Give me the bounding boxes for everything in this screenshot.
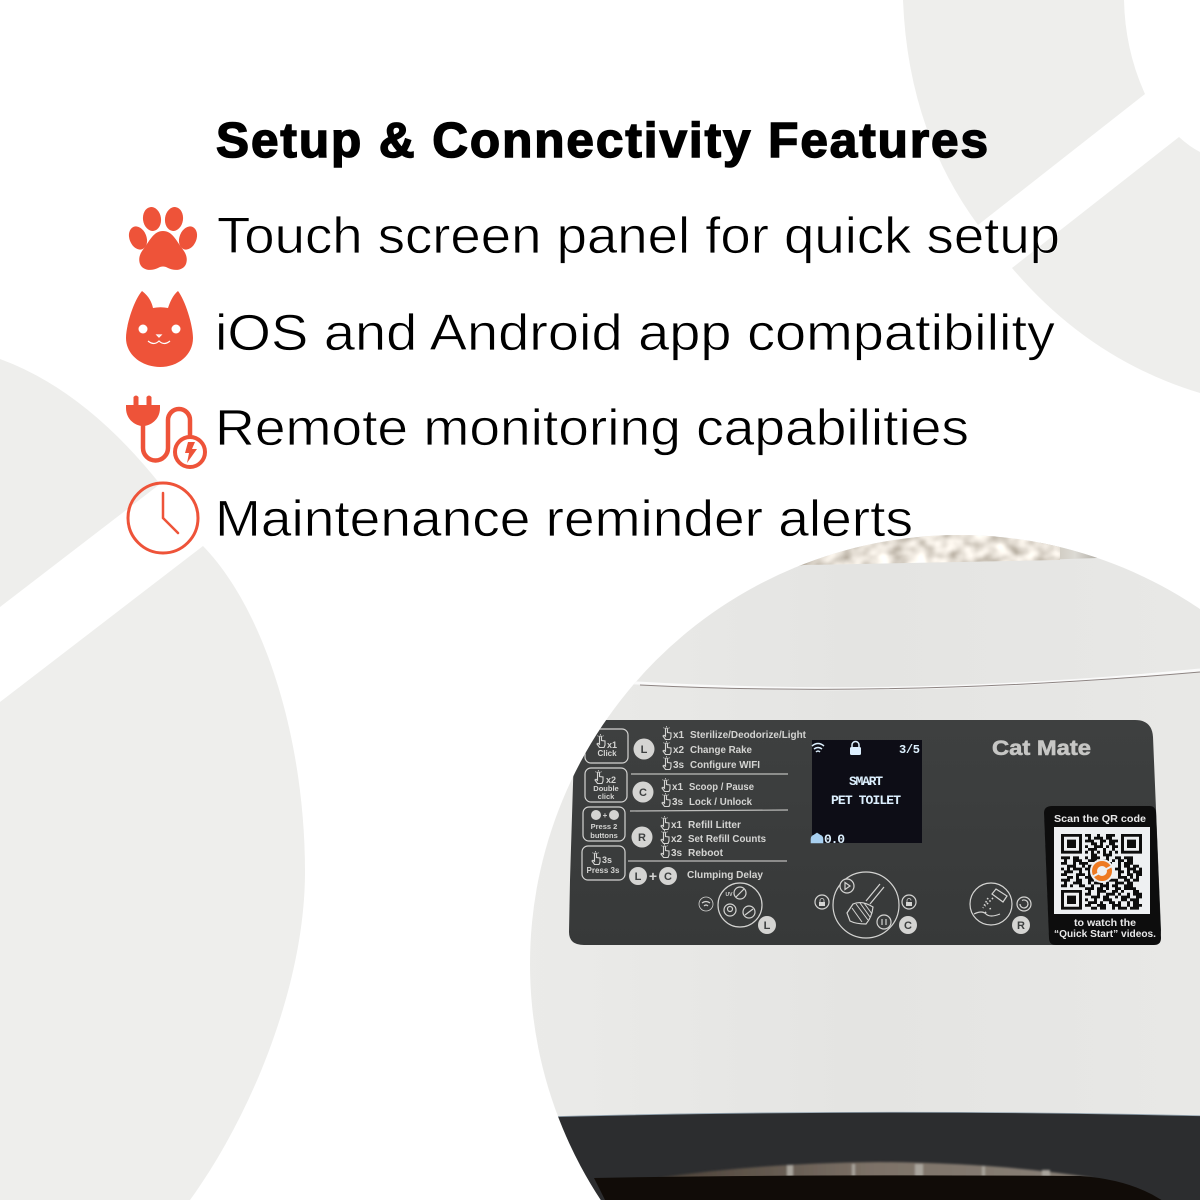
function list: 3s <box>671 848 683 859</box>
dial C: C <box>904 920 912 932</box>
function list: x2 <box>673 745 685 756</box>
function list: Clumping Delay <box>687 870 763 881</box>
function list: x1 <box>673 730 685 741</box>
QR sticker: to watch the <box>1074 918 1136 929</box>
left legend buttons: Press 2 <box>591 822 617 831</box>
function list: + <box>649 868 657 884</box>
litter <box>798 535 1097 566</box>
dial R <box>970 883 1031 934</box>
function list: Lock / Unlock <box>689 797 752 808</box>
function list: Configure WIFI <box>690 760 760 771</box>
function list: C <box>664 871 672 883</box>
lid seam <box>620 670 1200 689</box>
display screen: 3/5 <box>899 743 920 757</box>
function list: L <box>641 744 648 756</box>
dial L: UV <box>726 892 733 898</box>
dial C <box>815 872 917 938</box>
function list: Refill Litter <box>688 820 741 831</box>
display screen <box>811 740 922 847</box>
product photo <box>520 530 1200 1200</box>
display screen: 0.0 <box>824 832 845 847</box>
text: touch screen: Touch screen panel for quick setup <box>217 207 1060 264</box>
function list: Set Refill Counts <box>688 834 766 845</box>
function list: x1 <box>672 782 684 793</box>
dial L <box>699 883 776 934</box>
function list <box>628 726 807 885</box>
control panel <box>540 720 1161 945</box>
function list: Sterilize/Deodorize/Light <box>690 730 807 741</box>
QR sticker: Scan the QR code <box>1054 813 1146 825</box>
function list: R <box>638 832 646 844</box>
dial L: L <box>764 920 771 932</box>
icon: clock <box>128 483 198 553</box>
function list: Change Rake <box>690 745 752 756</box>
QR sticker: “Quick Start” videos. <box>1054 929 1156 940</box>
left legend buttons: x1 <box>607 740 617 750</box>
left legend buttons <box>582 729 628 880</box>
QR sticker <box>1044 806 1161 945</box>
icon: paw <box>126 206 200 270</box>
function list: x1 <box>671 820 683 831</box>
icon: plug and cord <box>126 396 205 467</box>
display screen: PET TOILET <box>831 793 901 808</box>
function list: 3s <box>673 760 685 771</box>
title: Setup & Connectivity Features <box>216 113 988 168</box>
function list: x2 <box>671 834 683 845</box>
display screen: SMART <box>849 774 883 789</box>
left legend buttons: 3s <box>602 855 612 865</box>
icon: cat face <box>126 291 193 367</box>
function list: L <box>635 871 642 883</box>
dial R: R <box>1017 920 1025 932</box>
text: maintenance alerts: Maintenance reminder alerts <box>215 490 913 547</box>
left legend buttons: + <box>603 811 608 820</box>
left legend buttons: Click <box>597 749 617 758</box>
text: remote monitoring: Remote monitoring capabilities <box>215 399 969 456</box>
text: app compatibility: iOS and Android app compatibility <box>215 304 1056 361</box>
function list: 3s <box>672 797 684 808</box>
dark base <box>540 1112 1200 1200</box>
left legend buttons: Press 3s <box>587 866 620 875</box>
Cat Mate logo: Cat Mate <box>992 737 1091 760</box>
left legend buttons: buttons <box>590 831 618 840</box>
function list: Scoop / Pause <box>689 782 754 793</box>
function list: C <box>639 787 647 799</box>
left legend buttons: x2 <box>606 775 616 785</box>
left legend buttons: Double <box>593 784 619 793</box>
left legend buttons: click <box>598 792 615 801</box>
function list: Reboot <box>688 848 724 859</box>
